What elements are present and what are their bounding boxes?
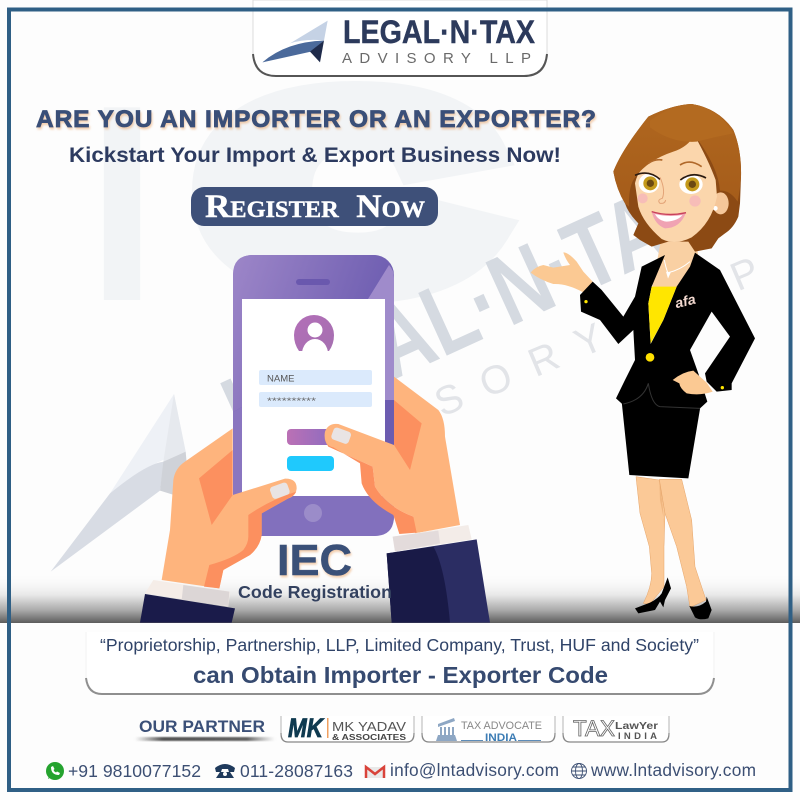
left sleeve xyxy=(140,580,235,623)
password input xyxy=(259,392,372,407)
icon: whatsapp xyxy=(46,762,64,780)
blouse xyxy=(648,287,677,343)
eyebrows xyxy=(648,160,702,167)
home button xyxy=(304,504,322,522)
logo tab xyxy=(253,0,547,76)
brooch: afa xyxy=(673,291,697,311)
watermark: rotated subtitle: ADVISORY LLP xyxy=(261,240,786,496)
IEC title: IEC xyxy=(277,536,352,585)
eligibility conclusion: can Obtain Importer - Exporter Code xyxy=(193,662,608,688)
eyes xyxy=(635,173,706,194)
watermark: arrow logo xyxy=(51,394,190,572)
skirt xyxy=(622,402,701,478)
partner card: Tax Advocate India: INDIA xyxy=(485,732,517,744)
headline: ARE YOU AN IMPORTER OR AN EXPORTER? xyxy=(36,106,596,133)
partner card: Tax Advocate India xyxy=(422,716,555,744)
jacket xyxy=(580,253,755,408)
our partner heading: OUR PARTNER xyxy=(139,717,265,736)
panel: eligibility xyxy=(86,632,714,694)
name input xyxy=(259,370,372,385)
name input: NAME xyxy=(267,374,294,384)
businesswoman illustration xyxy=(531,104,755,619)
partner card: MK Yadav: MK YADAV xyxy=(332,719,406,734)
partner card: Tax Lawyer India xyxy=(563,716,669,742)
purple button xyxy=(287,429,333,445)
code registration label: Code Registration xyxy=(238,582,392,602)
email: info@lntadvisory.com xyxy=(390,760,559,780)
phone xyxy=(233,255,394,536)
logo name: LEGAL·N·TAX xyxy=(343,14,536,50)
register now button: Register Now xyxy=(205,189,425,225)
watermark: big IEC letters: I xyxy=(87,48,157,360)
partner card: Tax Advocate India: TAX ADVOCATE xyxy=(461,720,542,732)
icon: temple xyxy=(436,718,457,741)
hair highlight xyxy=(650,104,733,142)
jacket button xyxy=(646,353,654,362)
left hand xyxy=(162,428,297,588)
logo subtitle: ADVISORY LLP xyxy=(342,50,531,67)
eligibility list: “Proprietorship, Partnership, LLP, Limited Company, Trust, HUF and Society” xyxy=(100,635,699,655)
phone screen xyxy=(242,299,385,496)
face xyxy=(635,135,717,242)
left hand gesture xyxy=(531,252,593,292)
neck and chest xyxy=(652,233,698,290)
avatar icon xyxy=(294,315,334,351)
cheeks xyxy=(638,193,701,207)
ear and earring xyxy=(713,192,729,214)
our partner heading xyxy=(135,717,275,741)
bottom shadow band xyxy=(0,572,800,623)
necklace xyxy=(664,260,690,273)
cuff buttons xyxy=(584,300,724,389)
phone number mobile: +91 9810077152 xyxy=(68,761,201,781)
website: www.lntadvisory.com xyxy=(590,760,756,780)
partner card: Tax Lawyer India: LawYer xyxy=(615,720,658,732)
legs xyxy=(636,477,706,607)
icon: globe xyxy=(572,764,586,778)
mouth xyxy=(652,212,686,228)
phone speaker xyxy=(296,279,330,285)
partner card: MK Yadav xyxy=(281,713,414,743)
phone number landline: 011-28087163 xyxy=(240,761,353,781)
back hair xyxy=(613,104,741,252)
hand on hip xyxy=(673,371,713,394)
blue button xyxy=(287,456,334,471)
sub headline: Kickstart Your Import & Export Business Now! xyxy=(69,143,561,167)
head xyxy=(613,104,741,252)
icon: logo arrow xyxy=(262,21,328,62)
nose xyxy=(659,177,666,203)
icon: mail xyxy=(366,767,384,778)
partner card: Tax Lawyer India: TAX xyxy=(573,716,615,741)
contact row xyxy=(46,760,756,781)
front hair xyxy=(613,104,741,207)
partner card: MK Yadav: MK xyxy=(288,713,325,743)
partner card: Tax Lawyer India: INDIA xyxy=(618,731,657,742)
right sleeve xyxy=(387,525,490,623)
watermark: big IEC letters xyxy=(87,48,488,360)
right hand xyxy=(324,377,460,534)
jacket seam xyxy=(623,383,700,408)
icon: telephone xyxy=(215,764,235,778)
shoes xyxy=(635,577,712,619)
partner card: MK Yadav: & ASSOCIATES xyxy=(332,732,406,742)
watermark: big IEC letters: C xyxy=(208,50,488,335)
password input: ********** xyxy=(267,396,316,407)
